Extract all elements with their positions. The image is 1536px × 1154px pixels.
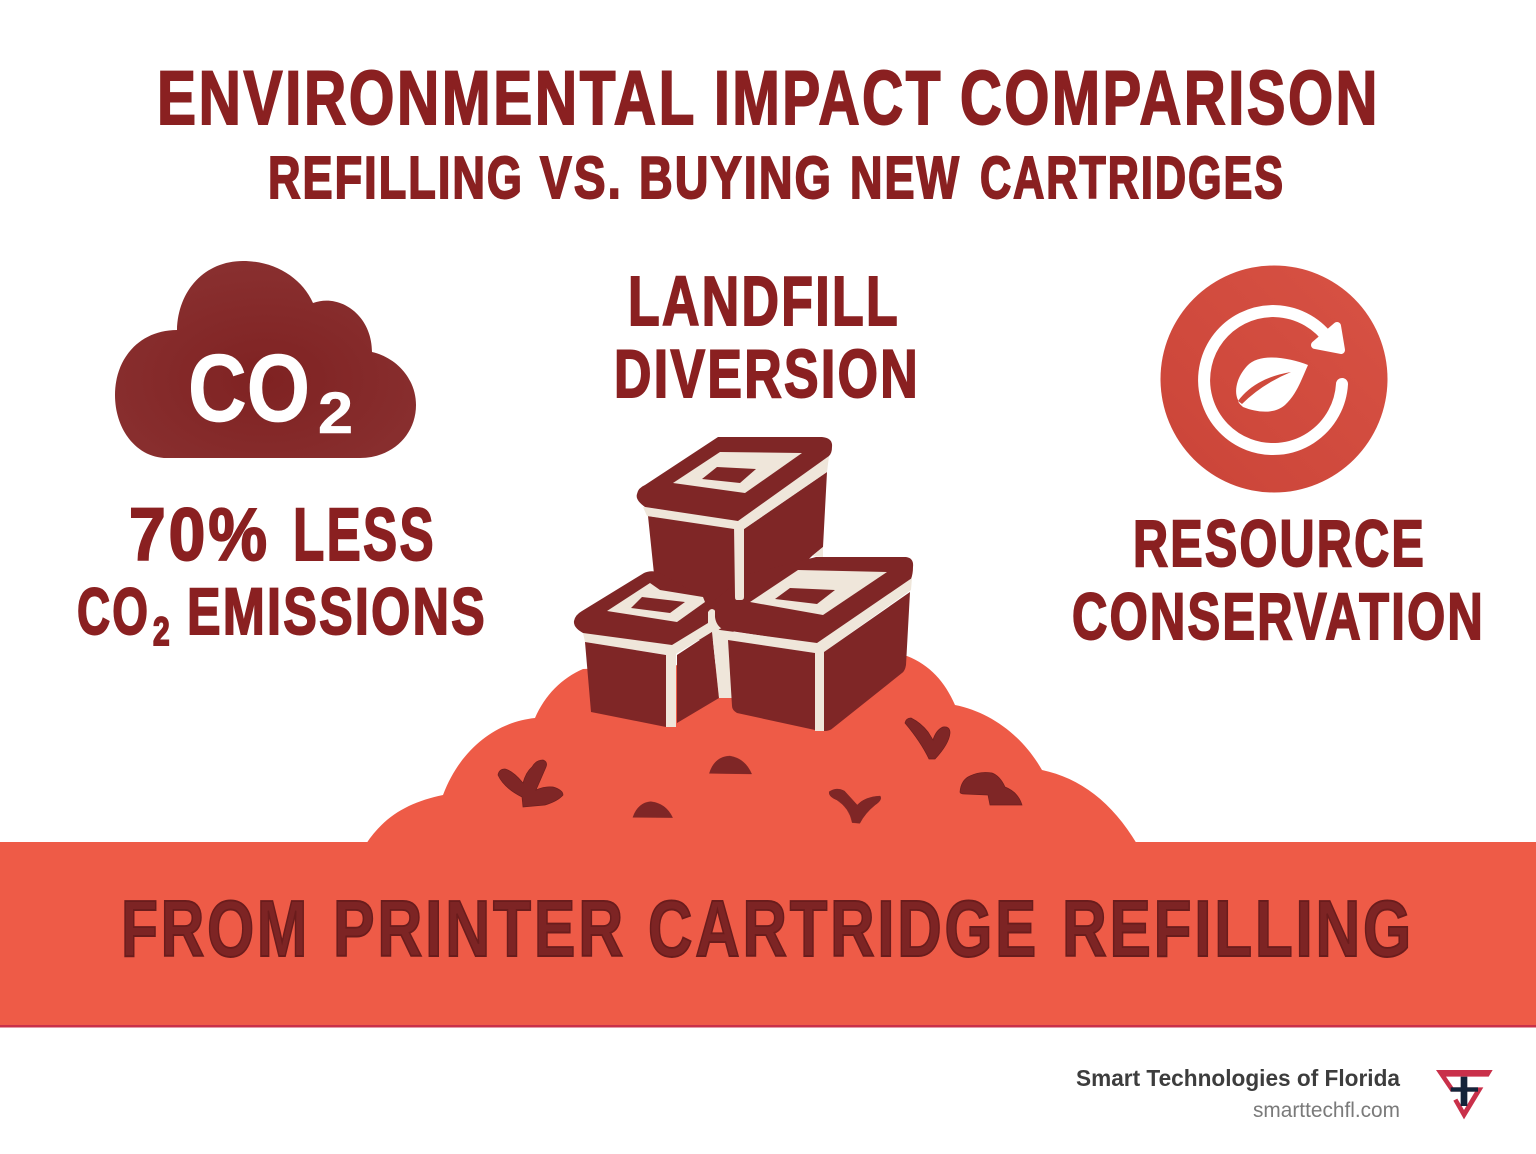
top box corner stripe [734,525,744,600]
banner text: PRINTER [333,884,626,973]
subtitle: NEW [850,145,961,211]
title: COMPARISON [960,56,1380,141]
heading: CO2 emissions [77,574,487,654]
heading: landfill diversion [614,262,920,412]
banner text [121,884,1414,973]
heading: resource: RESOURCE [1133,506,1426,580]
company url: smarttechfl.com [1253,1099,1400,1122]
banner band [0,842,1536,1028]
heading: 70% less [129,493,436,576]
panel: resource conservation [1072,266,1485,653]
title: ENVIRONMENTAL [157,56,697,141]
box: right [708,557,913,731]
shared dark body behind boxes [648,472,827,640]
title: IMPACT [714,56,943,141]
heading: 70% less: LESS [293,493,436,576]
icon: CO2 cloud: CO [188,335,310,442]
icon: CO2 cloud: 2 [318,381,353,446]
icon: CO2 cloud [115,261,416,458]
company name: Smart Technologies of Florida [1076,1065,1400,1091]
banner text: CARTRIDGE [648,884,1039,973]
panel: CO2 emissions [77,261,487,654]
subtitle: VS. [540,145,623,211]
icon: company logo [1436,1070,1493,1119]
heading: 70% less: 70% [129,493,270,576]
banner text: FROM [121,884,310,973]
heading: CO2 emissions: 2 [153,610,171,654]
box: top [637,437,832,557]
heading: CO2 emissions: CO [77,574,150,648]
debris in mound [498,718,1022,823]
subtitle: CARTRIDGES [980,145,1285,211]
subtitle: BUYING [639,145,833,211]
box: left [574,571,722,727]
footer [1076,1065,1493,1122]
icon: recycling leaf [1160,266,1388,492]
heading: CO2 emissions: EMISSIONS [187,574,487,648]
landfill mound [366,656,1137,844]
heading: landfill diversion: DIVERSION [614,336,920,412]
banner text: REFILLING [1062,884,1414,973]
title [157,56,1380,141]
icon: stacked cartridge boxes [574,437,913,731]
subtitle: REFILLING [268,145,524,211]
subtitle [268,145,1285,211]
heading: landfill diversion: LANDFILL [628,262,900,340]
